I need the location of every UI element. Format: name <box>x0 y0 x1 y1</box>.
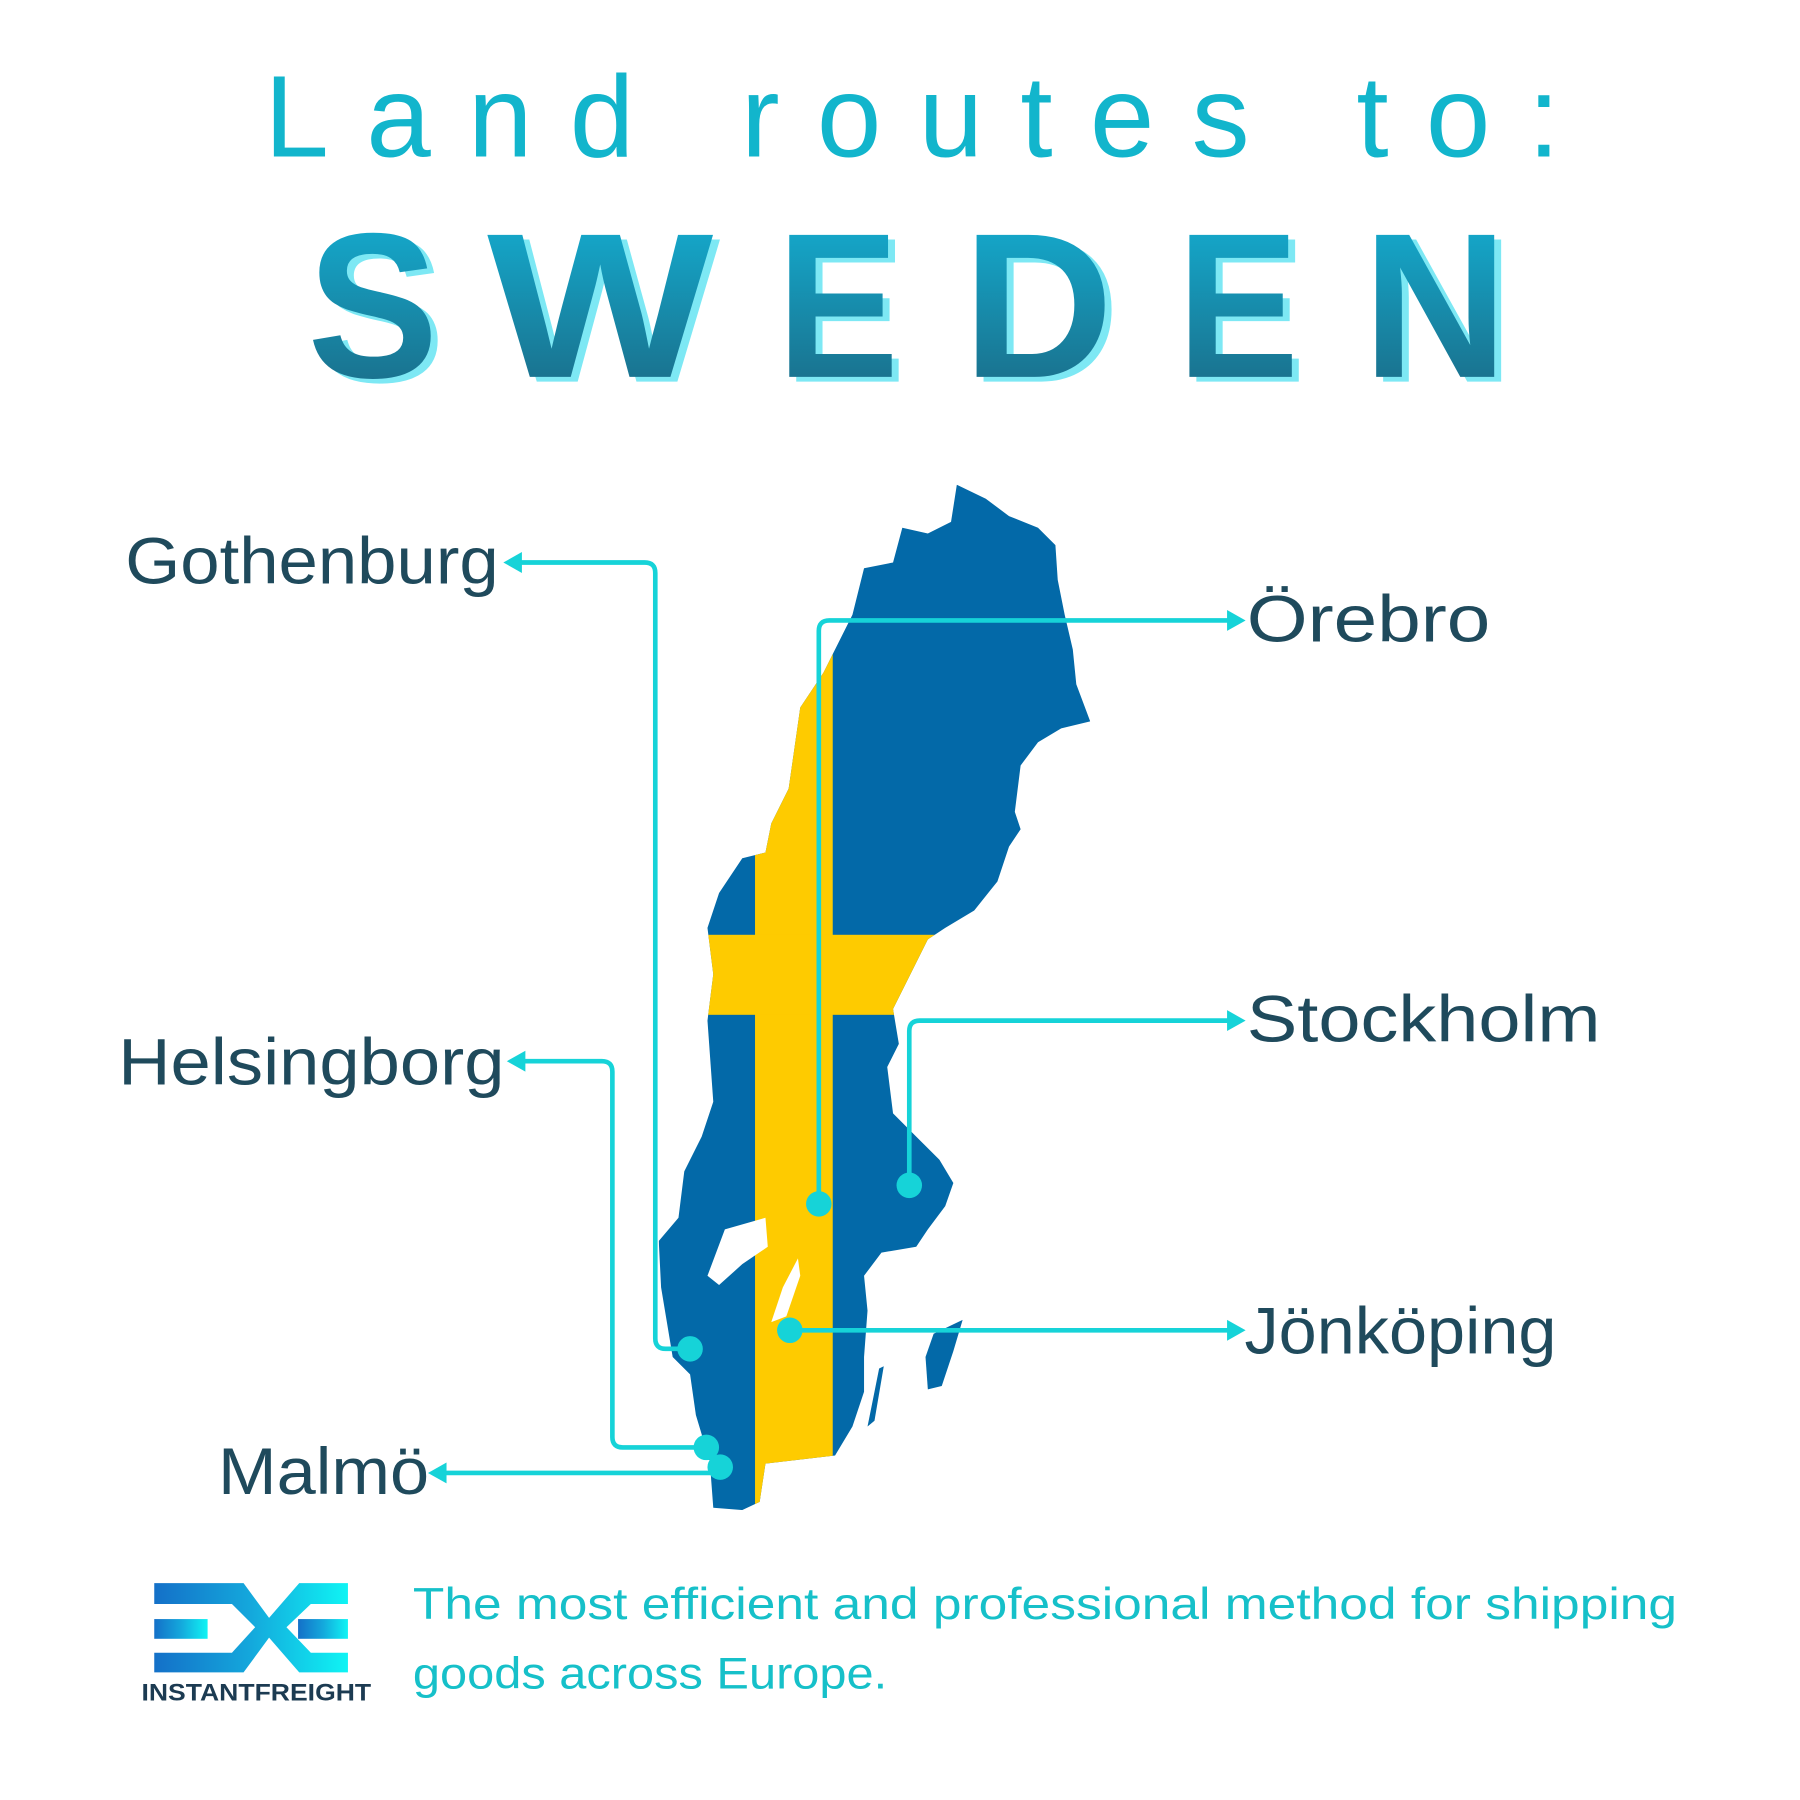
title: SWEDEN: E <box>777 190 899 421</box>
title: SWEDEN: S <box>314 195 445 426</box>
tagline <box>413 1580 1677 1699</box>
title: SWEDEN: D <box>970 195 1120 426</box>
logo: InstantFreight: INSTANTFREIGHT <box>141 1679 371 1706</box>
title: Land routes to: Land routes to: <box>264 52 1560 182</box>
title: SWEDEN: N <box>1363 190 1508 421</box>
city labels: Helsingborg <box>118 1025 505 1099</box>
city labels: Stockholm <box>1247 982 1601 1056</box>
route lines <box>441 562 1232 1473</box>
title: SWEDEN: W <box>487 190 713 421</box>
island: Öland <box>868 1366 884 1427</box>
title: SWEDEN: E <box>784 195 906 426</box>
tagline: The most efficient and professional method for shipping <box>413 1580 1677 1629</box>
logo: InstantFreight <box>141 1583 371 1706</box>
city labels <box>118 524 1601 1509</box>
city labels: Gothenburg <box>125 524 499 598</box>
city labels: Malmö <box>218 1435 429 1509</box>
lake: Vättern <box>771 1258 800 1322</box>
title: SWEDEN: E <box>1184 195 1306 426</box>
city labels: Jönköping <box>1244 1294 1556 1368</box>
title: SWEDEN: W <box>494 195 720 426</box>
title: SWEDEN: N <box>1370 195 1515 426</box>
tagline: goods across Europe. <box>413 1650 887 1699</box>
arrowheads and dots <box>428 552 1246 1483</box>
title: SWEDEN: D <box>963 190 1113 421</box>
lake: Vänern <box>707 1218 768 1285</box>
title: SWEDEN <box>307 190 1515 426</box>
map: Sweden with flag <box>658 484 1090 1510</box>
island: Gotland <box>926 1320 963 1389</box>
title: SWEDEN: S <box>307 190 438 421</box>
city labels: Örebro <box>1247 582 1490 656</box>
title: SWEDEN: E <box>1177 190 1299 421</box>
